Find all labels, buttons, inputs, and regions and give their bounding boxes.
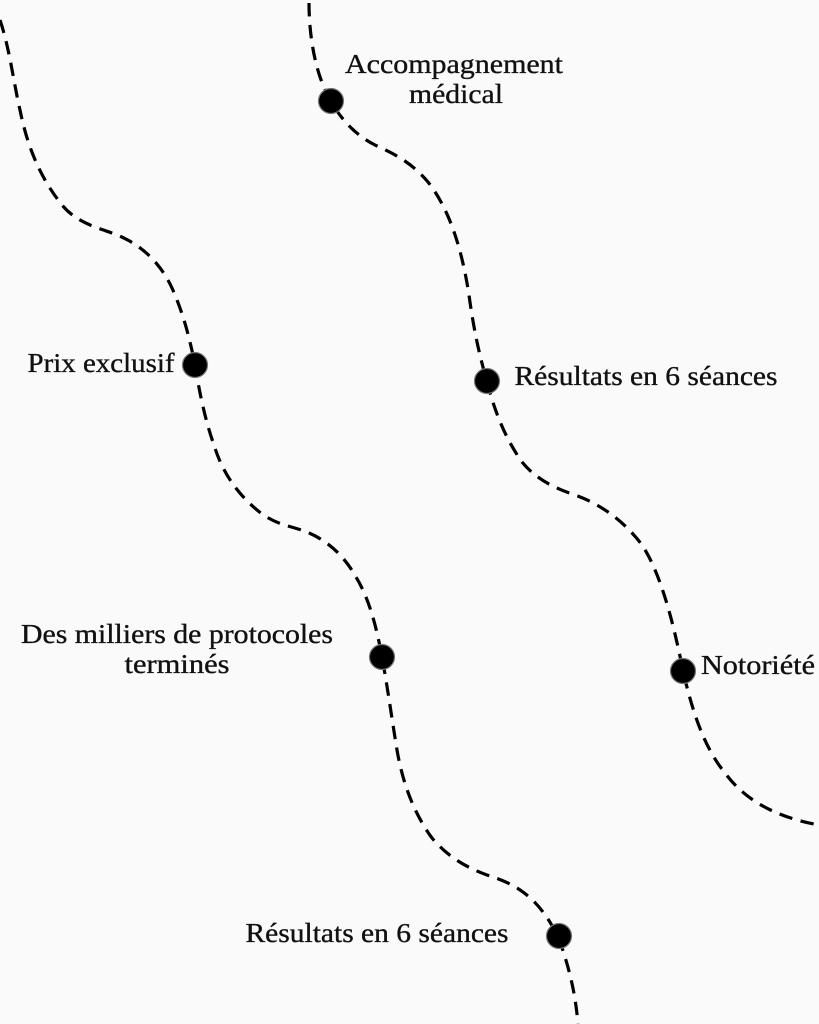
marker: Résultats en 6 séances (right) — [474, 368, 500, 394]
right dashed path — [309, 3, 819, 825]
label: Résultats en 6 séances (bottom): Résultats en 6 séances — [246, 918, 508, 948]
label: Accompagnement médical — [345, 49, 564, 109]
label: Notoriété: Notoriété — [701, 650, 815, 680]
left dashed path — [0, 20, 578, 1024]
label: Prix exclusif: Prix exclusif — [28, 348, 175, 378]
label: Des milliers de protocoles terminés: Des milliers de protocoles — [21, 619, 333, 649]
label: Des milliers de protocoles terminés: terminés — [124, 649, 230, 679]
label: Accompagnement médical: médical — [409, 79, 503, 109]
marker: Résultats en 6 séances (bottom) — [546, 924, 572, 948]
marker: Notoriété — [670, 658, 696, 684]
label: Résultats en 6 séances (right): Résultats en 6 séances — [514, 361, 778, 391]
marker: Des milliers de protocoles terminés — [370, 644, 394, 670]
marker: Accompagnement médical — [318, 88, 344, 114]
label: Des milliers de protocoles terminés — [21, 619, 333, 679]
marker: Prix exclusif — [182, 352, 208, 378]
label: Accompagnement médical: Accompagnement — [345, 49, 564, 79]
